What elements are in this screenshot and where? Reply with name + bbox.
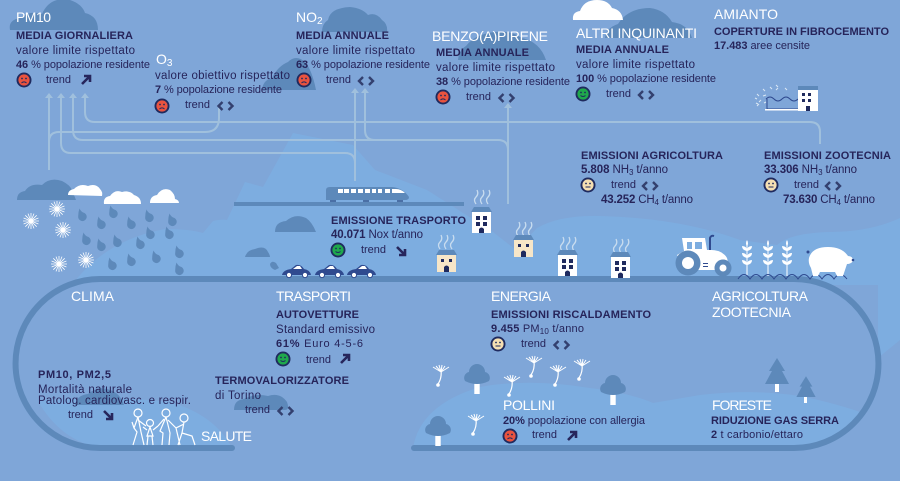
- panel: O3: trend: [185, 99, 210, 111]
- panel: PM10: MEDIA GIORNALIERA: [16, 30, 133, 42]
- panel: termovalorizzatore: TERMOVALORIZZATORE: [215, 375, 349, 387]
- panel: emissioni agricoltura: 3: [629, 168, 634, 177]
- panel: foreste: 2 t carbonio/ettaro: [711, 429, 803, 441]
- panel: trasporti: 61% Euro 4-5-6: [276, 338, 363, 350]
- panel: O3: O: [156, 51, 167, 67]
- heading: agricoltura zootecnia: [712, 288, 809, 320]
- panel: amianto: COPERTURE IN FIBROCEMENTO: [714, 26, 889, 38]
- panel: trasporti: AUTOVETTURE: [276, 309, 359, 321]
- icon: tractor: [676, 236, 732, 276]
- panel: termovalorizzatore: trend: [245, 404, 270, 416]
- panel: PM10: valore limite rispettato: [16, 45, 135, 57]
- panel: O3: 7 % popolazione residente: [155, 84, 282, 96]
- icon: family: [132, 409, 195, 445]
- panel: salute: trend: [68, 409, 93, 421]
- panel: emissioni zootecnia: 33.306 NH: [764, 164, 818, 176]
- panel: emissioni agricoltura: trend: [611, 179, 636, 191]
- panel: benzo(a)pirene: BENZO(A)PIRENE: [432, 28, 548, 44]
- panel: PM10: [16, 9, 150, 88]
- panel: O3: valore obiettivo rispettato: [155, 70, 290, 82]
- panel: altri inquinanti: [576, 25, 716, 102]
- panel: pollini: [502, 397, 646, 444]
- panel: pollini: 20% popolazione con allergia: [503, 415, 646, 427]
- panel: emissioni zootecnia: EMISSIONI ZOOTECNIA: [764, 150, 891, 162]
- icon: rain and snow clouds: [17, 180, 184, 275]
- panel: NO2: MEDIA ANNUALE: [296, 30, 389, 42]
- panel: pollini: POLLINI: [503, 397, 555, 413]
- heading: salute: SALUTE: [201, 428, 252, 444]
- panel: emissioni zootecnia: t/anno: [822, 164, 857, 176]
- panel: termovalorizzatore: di Torino: [215, 390, 261, 402]
- panel: altri inquinanti: trend: [606, 88, 631, 100]
- panel: amianto: AMIANTO: [714, 6, 778, 22]
- hills and mountain landscape: [16, 133, 900, 448]
- connector lines with arrows: [45, 88, 820, 204]
- panel: emissioni agricoltura: EMISSIONI AGRICOLTURA: [581, 150, 723, 162]
- panel: emissioni agricoltura: [580, 150, 723, 207]
- panel: NO2: valore limite rispettato: [296, 45, 415, 57]
- panel: pollini: trend: [532, 429, 557, 441]
- heading: clima: CLIMA: [71, 288, 115, 304]
- dark clouds behind text: [10, 0, 692, 410]
- panel: energia: 9.455 PM: [491, 323, 540, 335]
- panel: emissioni zootecnia: 73.630 CH: [783, 194, 837, 206]
- icon: wheat field: [738, 240, 847, 279]
- panel: PM10: PM10: [16, 9, 51, 25]
- panel: NO2: 2: [317, 16, 323, 27]
- panel: altri inquinanti: valore limite rispettato: [576, 59, 695, 71]
- main track loop: [16, 279, 878, 448]
- panel: altri inquinanti: 100 % popolazione residente: [576, 73, 716, 85]
- panel: trasporti: Standard emissivo: [276, 324, 375, 336]
- panel: NO2: trend: [326, 74, 351, 86]
- panel: benzo(a)pirene: [432, 28, 570, 104]
- panel: emissione trasporto: [330, 215, 466, 258]
- panel: emissioni zootecnia: 4: [837, 198, 842, 207]
- icon: fir trees: [765, 358, 816, 403]
- panel: salute: PM10, PM2,5: [38, 369, 111, 381]
- panel: emissioni zootecnia: [764, 150, 891, 207]
- panel: PM10: 46 % popolazione residente: [16, 59, 150, 71]
- icon: dandelions and trees: [425, 356, 626, 446]
- panel: benzo(a)pirene: trend: [466, 91, 491, 103]
- heading: agricoltura zootecnia: ZOOTECNIA: [712, 304, 792, 320]
- panel: salute: [38, 369, 191, 421]
- panel: emissioni zootecnia: trend: [794, 179, 819, 191]
- panel: energia: ENERGIA: [491, 288, 552, 304]
- panel: altri inquinanti: MEDIA ANNUALE: [576, 44, 669, 56]
- panel: O3: 3: [167, 58, 173, 69]
- panel: amianto: [714, 6, 889, 52]
- panel: energia: [490, 288, 651, 352]
- icon: pig: [806, 247, 854, 276]
- panel: salute: Mortalità naturale: [38, 384, 132, 396]
- panel: amianto: 17.483 aree censite: [714, 40, 810, 52]
- panel: benzo(a)pirene: 38 % popolazione residente: [436, 76, 570, 88]
- panel: trasporti: [276, 288, 375, 366]
- panel: foreste: FORESTE: [712, 397, 772, 413]
- panel: emissioni agricoltura: 43.252 CH: [601, 194, 655, 206]
- panel: emissioni zootecnia: t/anno: [841, 194, 875, 206]
- panel: energia: EMISSIONI RISCALDAMENTO: [491, 309, 651, 321]
- icon: train on rail: [234, 187, 464, 206]
- panel: benzo(a)pirene: MEDIA ANNUALE: [436, 47, 529, 59]
- icon: cars with exhaust: [270, 262, 376, 278]
- panel: energia: 10: [540, 327, 549, 336]
- panel: foreste: RIDUZIONE GAS SERRA: [711, 415, 839, 427]
- panel: benzo(a)pirene: valore limite rispettato: [436, 62, 555, 74]
- panel: salute: Patolog. cardiovasc. e respir.: [38, 395, 191, 407]
- panel: emissione trasporto: trend: [361, 244, 386, 256]
- panel: energia: t/anno: [549, 323, 584, 335]
- panel: emissioni agricoltura: 5.808 NH: [581, 164, 629, 176]
- panel: emissioni zootecnia: 3: [818, 168, 823, 177]
- panel: trasporti: TRASPORTI: [276, 288, 351, 304]
- panel: NO2: 63 % popolazione residente: [296, 59, 430, 71]
- panel: termovalorizzatore: [215, 375, 349, 416]
- panel: trasporti: trend: [306, 354, 331, 366]
- panel: emissione trasporto: 40.071 Nox t/anno: [331, 229, 423, 241]
- panel: emissioni agricoltura: t/anno: [633, 164, 668, 176]
- panel: altri inquinanti: ALTRI INQUINANTI: [576, 25, 697, 41]
- panel: O3: [154, 51, 290, 114]
- heading: agricoltura zootecnia: AGRICOLTURA: [712, 288, 809, 304]
- panel: NO2: [296, 9, 430, 88]
- panel: emissioni agricoltura: 4: [655, 198, 660, 207]
- panel: emissione trasporto: EMISSIONE TRASPORTO: [331, 215, 466, 227]
- icon: white cloud top: [573, 0, 623, 20]
- panel: emissioni agricoltura: t/anno: [659, 194, 693, 206]
- panel: foreste: [711, 397, 839, 441]
- panel: PM10: trend: [46, 74, 71, 86]
- panel: energia: trend: [521, 338, 546, 350]
- icon: asbestos roof building: [755, 85, 818, 111]
- panel: NO2: NO: [296, 9, 317, 25]
- icon: buildings with steam: [436, 190, 631, 278]
